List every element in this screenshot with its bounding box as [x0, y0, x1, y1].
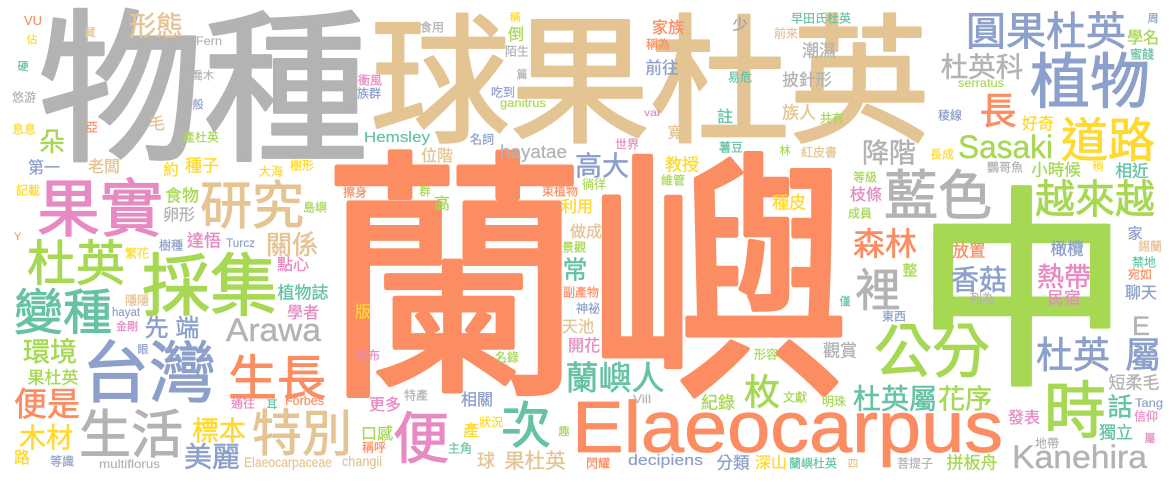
word: 少: 少: [732, 17, 748, 34]
word: 毛: 毛: [149, 115, 165, 133]
word: 達悟: 達悟: [187, 231, 221, 250]
word: hayat: hayat: [112, 307, 141, 319]
word: 常: 常: [562, 256, 588, 284]
word: 吃到: 吃到: [491, 86, 515, 100]
word: 小時候: 小時候: [1031, 160, 1081, 179]
word: 狀況: 狀況: [479, 415, 503, 430]
word: 路: 路: [14, 449, 30, 467]
word: ganitrus: ganitrus: [500, 98, 546, 110]
word: multiflorus: multiflorus: [99, 457, 160, 471]
word: 採集: 採集: [142, 249, 278, 325]
word: 約: 約: [163, 161, 179, 179]
word: 道路: 道路: [1061, 114, 1155, 167]
word: 森林: 森林: [853, 226, 917, 262]
word: 副產物: 副產物: [563, 285, 599, 300]
word: 般: 般: [192, 98, 204, 111]
word: 環境: 環境: [23, 337, 77, 367]
word: 杜英 blue: 杜英: [1036, 335, 1110, 376]
word: 陌生: 陌生: [505, 45, 529, 59]
word: 杜英 green: 杜英: [27, 238, 125, 292]
word: 形態: 形態: [129, 11, 183, 41]
word: 蜜餞: 蜜餞: [1130, 47, 1154, 62]
word: 關係: 關係: [266, 230, 318, 260]
word: 特別: 特別: [252, 406, 352, 462]
word: 相關: 相關: [461, 391, 493, 409]
word: Tang: Tang: [1135, 398, 1163, 410]
word: 變種: 變種: [14, 287, 112, 341]
word: 記載: 記載: [16, 183, 40, 198]
word: 深山: 深山: [755, 454, 787, 472]
word: decipiens: decipiens: [628, 452, 703, 469]
word: 屬 small: 屬: [1144, 432, 1156, 445]
word: 公分: 公分: [874, 320, 990, 385]
word: 長: 長: [980, 91, 1016, 132]
word: 放置: 放置: [952, 241, 986, 260]
word: 更多: 更多: [369, 396, 401, 414]
word: 朵: 朵: [39, 127, 65, 157]
word: 信仰: 信仰: [1134, 409, 1158, 424]
word: Sasaki: Sasaki: [958, 129, 1053, 165]
word: 植物誌: 植物誌: [278, 283, 328, 302]
word: 產: 產: [463, 422, 479, 440]
word: 家: 家: [1127, 226, 1143, 243]
word: 擦身: 擦身: [343, 185, 367, 200]
word: 利用: 利用: [561, 198, 593, 216]
word: 群: 群: [420, 184, 430, 198]
word: 眼: 眼: [138, 343, 148, 356]
word: 地帶: 地帶: [1035, 437, 1059, 451]
word: 學名: 學名: [1127, 29, 1159, 47]
word: Kanehira: Kanehira: [1012, 439, 1147, 475]
word: 等級: 等級: [853, 170, 877, 185]
word: 維管: 維管: [661, 173, 685, 188]
word: 好奇: 好奇: [1022, 115, 1054, 133]
word: 次: 次: [501, 398, 551, 454]
word: 族群: 族群: [357, 87, 381, 101]
word: VU: VU: [24, 13, 42, 28]
word: 越來越: 越來越: [1035, 178, 1155, 222]
word: 隱隱: 隱隱: [125, 294, 149, 308]
word: 林: 林: [780, 143, 790, 157]
word: 蘭嶼: 蘭嶼: [321, 136, 851, 432]
word: 花序: 花序: [938, 384, 992, 414]
word: 稜線: 稜線: [938, 108, 962, 123]
word: 開花: 開花: [568, 337, 600, 355]
word: var: var: [644, 107, 662, 119]
word: 禁地: 禁地: [1132, 256, 1156, 270]
word: 潮濕: 潮濕: [802, 41, 836, 60]
word: 明珠: 明珠: [822, 395, 846, 409]
word: 大海: 大海: [259, 164, 283, 179]
word: 註: 註: [717, 108, 733, 126]
word: 繁花: 繁花: [125, 246, 149, 261]
word: 神祕: 神祕: [576, 302, 600, 316]
word: 島嶼: 島嶼: [303, 200, 327, 215]
word: 趣: 趣: [558, 424, 570, 438]
word: 標本: 標本: [192, 416, 246, 446]
word: 屬 blue: 屬: [1125, 335, 1161, 376]
word: 口感: 口感: [361, 424, 393, 443]
word: 版: 版: [355, 303, 371, 321]
word: 硬: 硬: [18, 60, 28, 73]
word: 名錄: 名錄: [495, 350, 519, 365]
word: 息息: 息息: [12, 122, 36, 137]
word: Hemsley: Hemsley: [364, 129, 431, 146]
word: 研究: 研究: [200, 178, 304, 236]
word: 錫蘭: 錫蘭: [1138, 239, 1162, 254]
word: 高大: 高大: [575, 151, 629, 181]
word: 球: 球: [477, 451, 495, 471]
word: 紅皮書: 紅皮書: [801, 146, 837, 160]
word: 名詞: 名詞: [470, 132, 494, 147]
word: 家族: 家族: [652, 19, 684, 37]
word: 美麗: 美麗: [184, 442, 240, 473]
word: Fern: Fern: [196, 36, 222, 48]
word: 金剛: 金剛: [116, 319, 138, 333]
word: 前往: 前往: [646, 58, 678, 77]
word: 耳: 耳: [266, 399, 278, 411]
word: 周: 周: [1148, 12, 1158, 25]
word: 共有: 共有: [820, 112, 844, 126]
word: 第一: 第一: [28, 158, 60, 177]
word: 果杜英 green: 果杜英: [28, 368, 78, 387]
word: 特產: 特產: [404, 388, 428, 403]
word: 喬木: 喬木: [192, 68, 214, 82]
word: 降階: 降階: [862, 138, 916, 168]
word: 天池: 天池: [562, 318, 594, 336]
word: 中: 中: [914, 173, 1130, 414]
word: 主角: 主角: [448, 442, 472, 456]
word: Turcz: Turcz: [226, 236, 255, 250]
word: 四: 四: [848, 458, 858, 470]
word: 橄欖: 橄欖: [1050, 239, 1084, 258]
word: 披針形: 披針形: [782, 70, 832, 89]
word: 紀錄: 紀錄: [701, 393, 735, 412]
word: 稍: 稍: [1092, 159, 1104, 173]
word: 倒: 倒: [508, 26, 524, 44]
word: 樹形: 樹形: [290, 159, 314, 173]
word: Arawa: Arawa: [226, 312, 321, 348]
word: 民宿: 民宿: [1048, 288, 1080, 307]
word: Elaeocarpus: Elaeocarpus: [572, 388, 1003, 468]
word: 易危: 易危: [728, 71, 752, 85]
word: 點心: 點心: [277, 256, 309, 274]
word: 枝條: 枝條: [850, 186, 882, 204]
word: 衝風: 衝風: [358, 74, 382, 88]
word: 稱: 稱: [510, 11, 520, 24]
word: 拼板舟: 拼板舟: [946, 453, 998, 472]
word: 便是: 便是: [14, 386, 80, 423]
word: 果杜英 tan: 果杜英: [504, 450, 566, 473]
word: 宛如: 宛如: [1128, 267, 1152, 282]
word: 發表: 發表: [1008, 409, 1040, 427]
word: 教授: 教授: [665, 155, 699, 174]
word: 通往: 通往: [231, 396, 255, 411]
word: 稱為: 稱為: [646, 38, 670, 52]
word: 東西: 東西: [882, 310, 906, 324]
word: 物種: 物種: [38, 0, 368, 183]
word: 生活: 生活: [79, 407, 183, 465]
word: 觀賞: 觀賞: [823, 341, 857, 360]
word: 世界: 世界: [615, 138, 639, 152]
word: 杜英科: 杜英科: [941, 51, 1023, 82]
word: 分類: 分類: [716, 453, 750, 472]
word: 文獻: 文獻: [783, 390, 807, 405]
word: E: E: [1132, 311, 1150, 341]
word: 熱帶: 熱帶: [1037, 262, 1091, 292]
word: 樹種: 樹種: [159, 239, 183, 253]
word: 聊天: 聊天: [1125, 284, 1157, 302]
word: 等識: 等識: [50, 454, 74, 469]
word: 分布: 分布: [356, 349, 380, 363]
word: 稱呼: 稱呼: [362, 441, 386, 455]
word: 果實: 果實: [37, 175, 163, 245]
word: 獨立: 獨立: [1099, 423, 1133, 442]
word: 植物: 植物: [1030, 49, 1150, 116]
word: 蘭嶼杜英: 蘭嶼杜英: [789, 456, 837, 471]
word: 相近: 相近: [1116, 161, 1149, 180]
word: 球果杜英: 球果杜英: [370, 4, 930, 161]
word: 高: 高: [434, 195, 450, 213]
word: 薯豆: 薯豆: [719, 141, 743, 155]
word: 話: 話: [1107, 394, 1133, 422]
word: changii: changii: [342, 453, 382, 469]
word: 篇: 篇: [516, 67, 528, 81]
word: 佔: 佔: [26, 32, 38, 46]
word: 僅: 僅: [840, 294, 850, 308]
word: 卵形: 卵形: [163, 206, 195, 224]
word: Y: Y: [14, 231, 22, 243]
word: 便: 便: [393, 407, 449, 470]
word: 蘭嶼人: 蘭嶼人: [566, 360, 664, 397]
word: 形容: 形容: [754, 347, 778, 362]
word: 種皮: 種皮: [772, 193, 806, 212]
word: 先端: 先 端: [145, 315, 199, 342]
word: 景觀: 景觀: [562, 241, 586, 255]
word: 木材: 木材: [19, 423, 73, 453]
word: 產杜英: 產杜英: [183, 130, 219, 145]
word: 長成: 長成: [930, 148, 954, 162]
word: Vill: Vill: [633, 392, 651, 406]
word: 成員: 成員: [848, 207, 872, 221]
word: 裡: 裡: [855, 265, 901, 316]
word: 時: 時: [1044, 378, 1106, 447]
word: 短柔毛: 短柔毛: [1108, 373, 1160, 392]
word: 徜徉: 徜徉: [582, 177, 606, 192]
word: 做成: 做成: [570, 223, 602, 241]
word: serratus: serratus: [958, 76, 1004, 90]
word: 寬: 寬: [667, 124, 683, 142]
word: 生長: 生長: [228, 353, 326, 407]
word: 悠游: 悠游: [12, 90, 36, 105]
word: Forbes: Forbes: [285, 393, 324, 408]
word: 學者: 學者: [287, 304, 319, 322]
word: 種子: 種子: [185, 156, 219, 175]
word: 圓果杜英: 圓果杜英: [966, 10, 1126, 54]
word: 位階: 位階: [421, 147, 453, 165]
word: 前來: 前來: [774, 26, 798, 41]
word: 列為: 列為: [970, 292, 994, 306]
word: 老闆: 老闆: [88, 158, 120, 176]
word: 枚: 枚: [744, 372, 780, 413]
word: 香菇: 香菇: [951, 265, 1007, 296]
word: 藏: 藏: [84, 26, 96, 39]
word: 閃耀: 閃耀: [586, 457, 610, 471]
word: 鸚哥魚: 鸚哥魚: [987, 161, 1023, 175]
word: 藍色: 藍色: [884, 167, 992, 227]
word: 食用: 食用: [420, 20, 444, 35]
word: hayatae: hayatae: [500, 142, 567, 162]
word: 整: 整: [902, 263, 918, 280]
word: 台灣: 台灣: [82, 336, 216, 411]
word: 菩提子: 菩提子: [897, 456, 933, 471]
word: 食物: 食物: [165, 186, 199, 205]
word: 亞: 亞: [86, 121, 98, 135]
word: 族人: 族人: [782, 103, 816, 122]
word: 束植物: 束植物: [542, 184, 578, 199]
word: 早田氏杜英: 早田氏杜英: [791, 11, 851, 26]
word: 杜英屬: 杜英屬: [853, 384, 937, 415]
word: Elaeocarpaceae: Elaeocarpaceae: [244, 454, 332, 470]
